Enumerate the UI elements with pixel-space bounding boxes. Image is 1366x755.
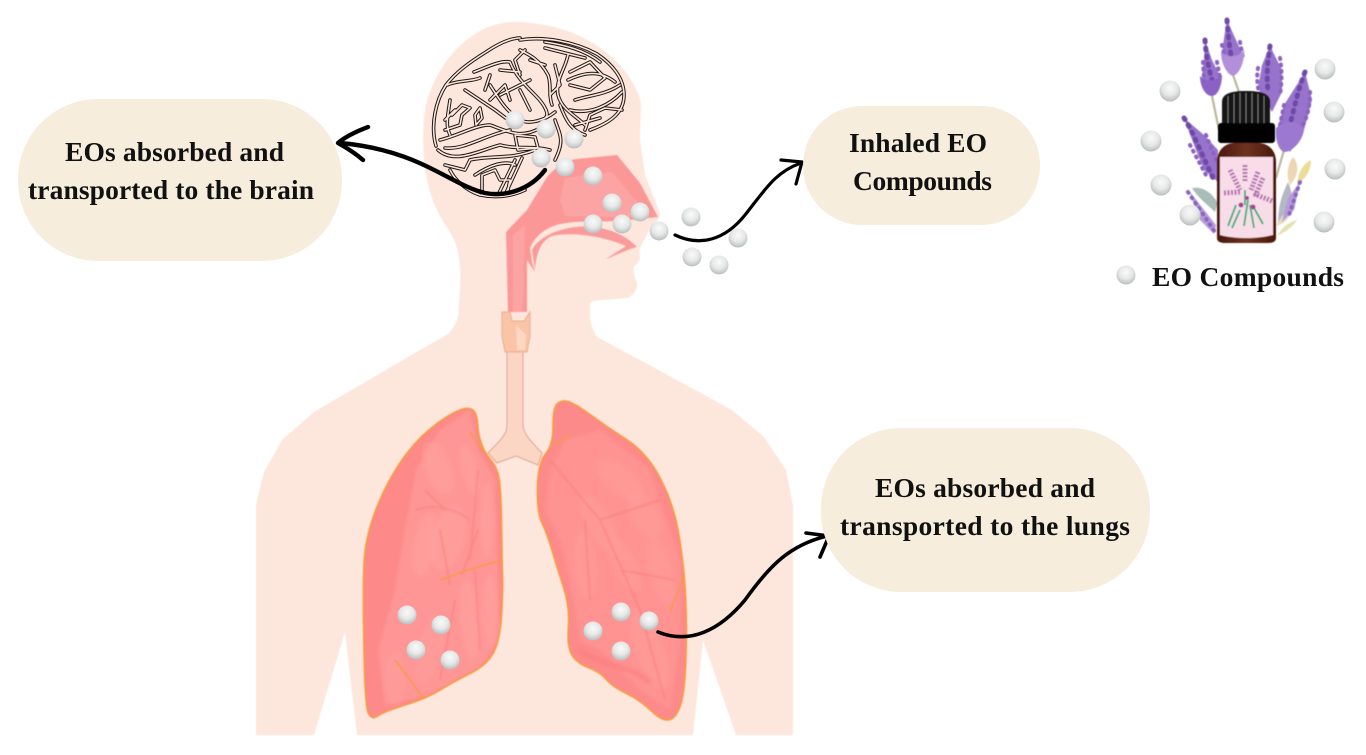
callout: lungs: transported to the lungs xyxy=(840,510,1130,541)
larynx and trachea xyxy=(488,312,542,465)
callout: lungs xyxy=(821,428,1150,592)
arrow: to the lungs callout xyxy=(658,533,829,637)
arrow: to the inhaled compounds callout xyxy=(675,160,802,241)
callout: lungs: EOs absorbed and xyxy=(875,472,1095,503)
icon: essential oil bottle xyxy=(1217,91,1276,243)
callout: brain: EOs absorbed and xyxy=(65,136,284,167)
arrow: to the brain callout xyxy=(338,127,545,194)
callout: inhaled compounds: Compounds xyxy=(853,165,992,196)
nasal cavity and throat xyxy=(506,155,658,312)
callout: inhaled compounds: Inhaled EO xyxy=(849,127,987,158)
human body silhouette xyxy=(256,22,793,735)
callout: brain: transported to the brain xyxy=(28,174,314,205)
right lung xyxy=(537,401,686,720)
EO particles in the airway and brain xyxy=(506,110,748,274)
EO particles around the bottle xyxy=(1140,58,1346,232)
EO particles in the lungs xyxy=(398,602,658,670)
left lung xyxy=(364,408,503,718)
callout: inhaled compounds xyxy=(803,106,1040,225)
legend: EO compounds: EO Compounds xyxy=(1152,261,1344,292)
icon: lavender sprigs xyxy=(1184,20,1312,236)
callout: brain xyxy=(18,99,342,261)
brain xyxy=(434,38,624,197)
